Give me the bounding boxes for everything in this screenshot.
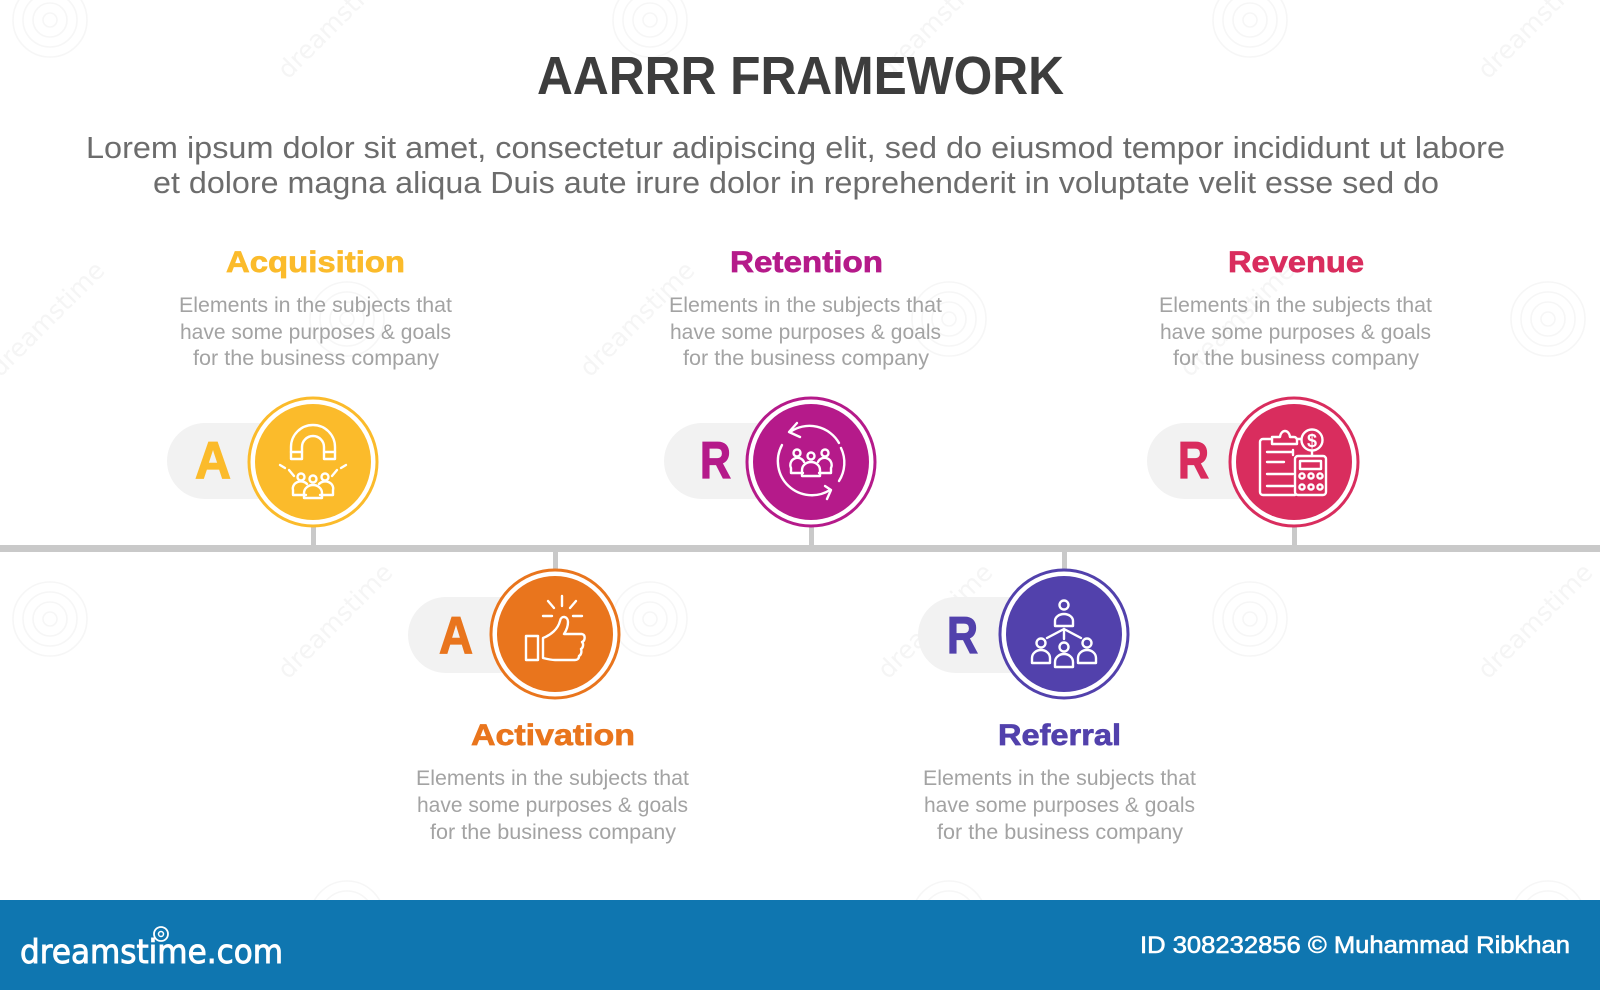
description: Acquisition: have some purposes & goals xyxy=(180,321,451,344)
heading: Referral: Referral xyxy=(998,719,1121,752)
description: Referral: have some purposes & goals xyxy=(924,794,1195,817)
icon: clipboard and calculator xyxy=(1230,398,1358,526)
description: Acquisition xyxy=(179,294,452,370)
letter pill: A: A xyxy=(195,432,231,490)
letter pill: R: R xyxy=(1178,432,1209,490)
description: Retention xyxy=(669,294,942,370)
watermark pattern: dreamstime xyxy=(272,558,398,684)
watermark pattern: dreamstime xyxy=(1472,558,1598,684)
description: Activation: Elements in the subjects that xyxy=(416,767,689,790)
description: Revenue xyxy=(1159,294,1432,370)
watermark pattern: dreamstime xyxy=(574,256,700,382)
description: Referral xyxy=(923,767,1196,844)
timeline xyxy=(0,525,1600,572)
description: Referral: for the business company xyxy=(937,821,1184,844)
letter pill: A xyxy=(167,423,297,499)
description: Activation: for the business company xyxy=(430,821,677,844)
panel: Revenue xyxy=(1147,246,1432,526)
description: Revenue: Elements in the subjects that xyxy=(1159,294,1432,317)
description: Revenue: have some purposes & goals xyxy=(1160,321,1431,344)
description: Retention: have some purposes & goals xyxy=(670,321,941,344)
watermark pattern: dreamstime xyxy=(872,558,998,684)
title: AARRR FRAMEWORK xyxy=(537,46,1064,106)
subtitle paragraph: et dolore magna aliqua Duis aute irure dolor in reprehenderit in voluptate velit esse sed do xyxy=(153,165,1439,200)
icon: retention cycle with people xyxy=(747,398,875,526)
letter pill: R: R xyxy=(700,432,731,490)
letter pill: A: A xyxy=(439,607,473,665)
icon: referral network xyxy=(1000,570,1128,698)
icon: magnet attracting people xyxy=(249,398,377,526)
description: Revenue: for the business company xyxy=(1173,347,1420,370)
icon: thumbs up xyxy=(491,570,619,698)
description: Activation xyxy=(416,767,689,844)
subtitle paragraph xyxy=(86,130,1505,200)
panel: Acquisition xyxy=(167,246,452,526)
description: Retention: for the business company xyxy=(683,347,930,370)
description: Retention: Elements in the subjects that xyxy=(669,294,942,317)
image credit: ID 308232856 © Muhammad Ribkhan xyxy=(1140,932,1570,959)
letter pill: R: R xyxy=(947,607,978,665)
logo: dreamstime: dreamstime.com xyxy=(20,932,283,971)
description: Acquisition: Elements in the subjects that xyxy=(179,294,452,317)
watermark pattern: dreamstime xyxy=(1174,256,1300,382)
panel: Activation xyxy=(408,570,689,844)
letter pill: R xyxy=(1147,423,1277,499)
heading: Revenue: Revenue xyxy=(1228,246,1364,279)
description: Referral: Elements in the subjects that xyxy=(923,767,1196,790)
icon: clipboard and calculator: $ xyxy=(1307,431,1317,451)
description: Activation: have some purposes & goals xyxy=(417,794,688,817)
description: Acquisition: for the business company xyxy=(193,347,440,370)
heading: Retention: Retention xyxy=(730,246,883,279)
heading: Acquisition: Acquisition xyxy=(226,246,405,279)
letter pill: A xyxy=(408,597,538,673)
letter pill: R xyxy=(918,597,1048,673)
heading: Activation: Activation xyxy=(471,719,635,752)
letter pill: R xyxy=(664,423,794,499)
panel: Retention xyxy=(664,246,942,526)
subtitle paragraph: Lorem ipsum dolor sit amet, consectetur adipiscing elit, sed do eiusmod tempor incididunt ut labore xyxy=(86,130,1505,165)
panel: Referral xyxy=(918,570,1196,844)
footer banner xyxy=(0,900,1600,990)
